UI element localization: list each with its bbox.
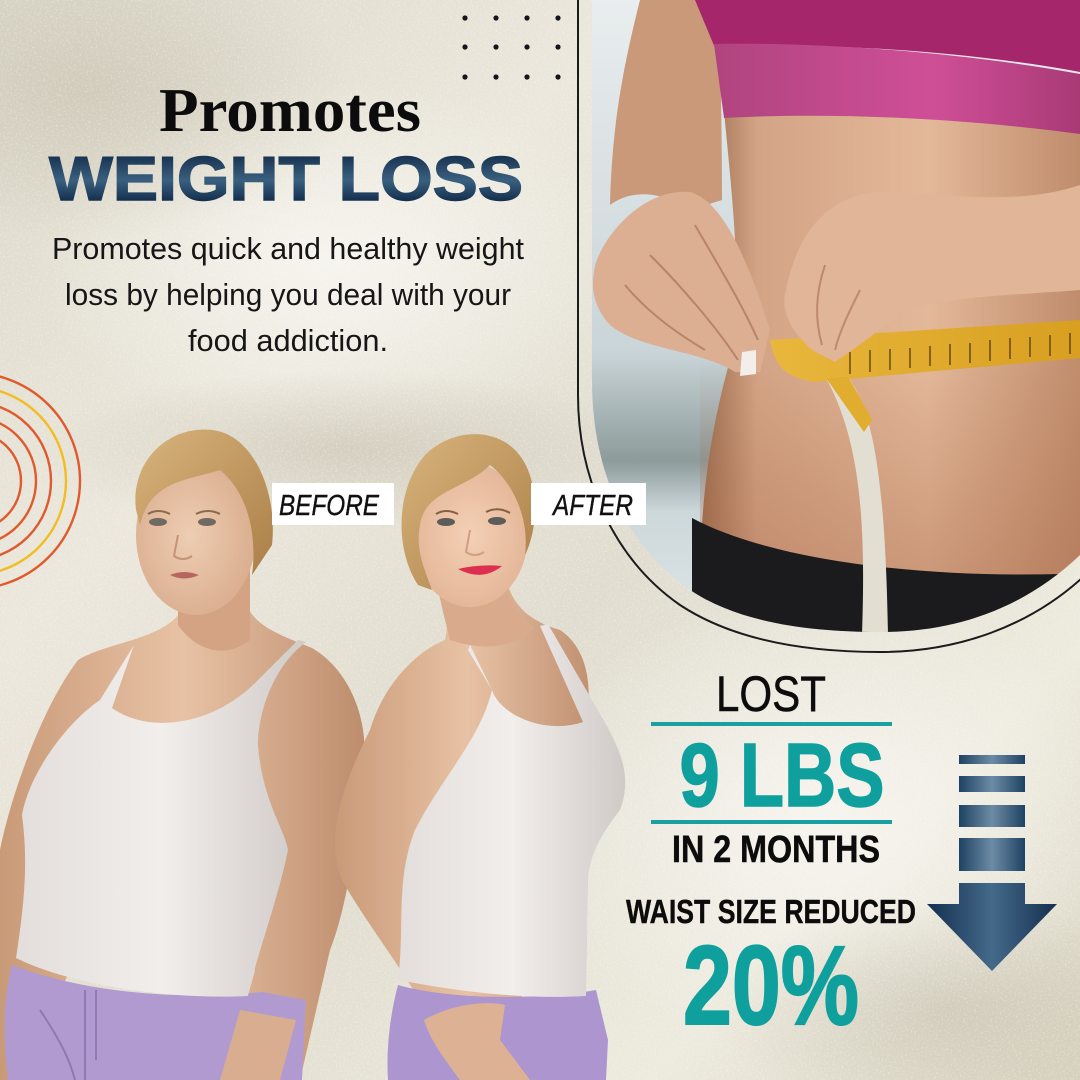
tape hanging [826,376,888,634]
shorts [387,985,608,1080]
lower belly shading [700,397,1080,600]
description text: food addiction. [188,323,388,358]
shorts [5,965,306,1080]
description text [52,231,524,358]
hand on hip [220,1010,296,1080]
black shorts [692,518,1058,632]
torso [700,90,1080,600]
tank top [16,640,306,997]
icon: down arrow [927,755,1057,971]
label: AFTER: AFTER [551,490,633,522]
label: AFTER [531,483,646,525]
hand right [784,185,1080,362]
photo: waist being measured [590,0,1080,640]
stat: IN 2 MONTHS: IN 2 MONTHS [672,829,880,871]
label: BEFORE: BEFORE [279,490,380,522]
photo outline [578,0,1080,652]
tape horizontal [770,320,1080,382]
tank top [398,624,625,997]
skin [335,570,600,1080]
skin [0,600,365,1080]
stat: 20%: 20% [683,923,859,1048]
hair [135,430,273,575]
person: after [335,434,625,1080]
head [136,455,256,615]
head [412,463,528,607]
person: before [0,430,365,1080]
stat: WAIST SIZE REDUCED: WAIST SIZE REDUCED [626,893,916,930]
title: Promotes: Promotes [159,77,421,145]
title: WEIGHT LOSS: WEIGHT LOSS [49,145,523,214]
sports bra [695,0,1080,72]
description text: loss by helping you deal with your [65,277,511,312]
face [436,509,510,575]
concentric arcs decoration [0,373,80,589]
label: BEFORE [272,483,394,525]
face [148,511,220,578]
rules and stat: 9 LBS: 9 LBS [680,726,884,826]
neck [178,570,250,651]
neck [435,575,535,646]
stat: LOST: LOST [716,666,826,722]
description text: Promotes quick and healthy weight [52,231,524,266]
hair [402,434,535,590]
hand on hip [424,1003,530,1080]
decorative dot grid [462,15,561,80]
arm left [610,0,722,210]
hand left [593,192,770,376]
